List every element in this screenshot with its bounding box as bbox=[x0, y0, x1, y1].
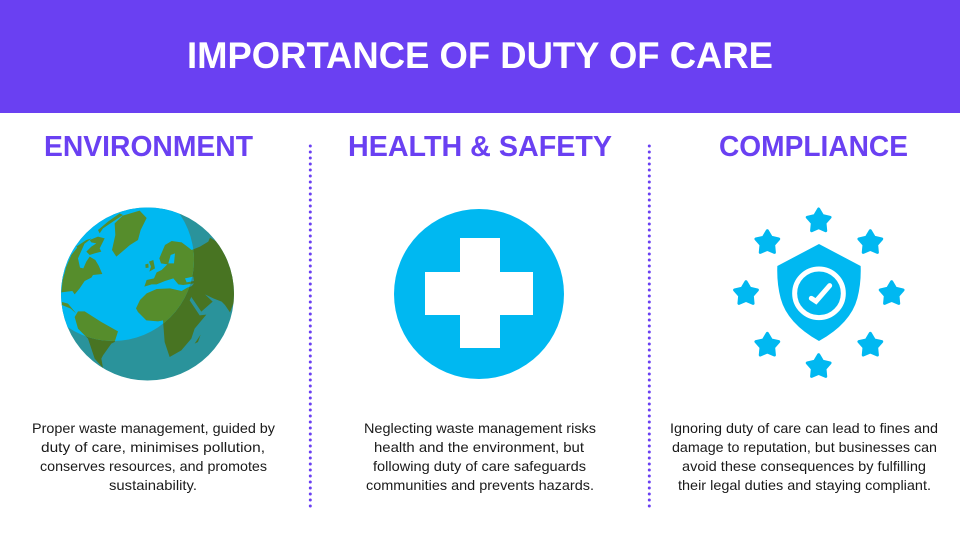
text: environment description bbox=[32, 420, 275, 493]
title: IMPORTANCE OF DUTY OF CARE bbox=[187, 35, 773, 76]
header banner bbox=[0, 0, 960, 113]
panel: health and safety bbox=[348, 131, 612, 493]
icon: medical cross bbox=[394, 209, 564, 379]
heading: health and safety: HEALTH & SAFETY bbox=[348, 131, 612, 163]
panel: compliance bbox=[670, 131, 938, 493]
icon: shield with stars bbox=[735, 209, 903, 376]
icon: globe bbox=[61, 208, 234, 380]
text: compliance description: their legal duties and staying compliant. bbox=[678, 477, 931, 493]
text: health and safety description: health and the environment, but bbox=[374, 439, 584, 455]
text: compliance description bbox=[670, 420, 938, 493]
divider left bbox=[309, 146, 312, 509]
text: health and safety description: Neglecting waste management risks bbox=[364, 420, 596, 436]
divider right bbox=[648, 146, 651, 509]
text: environment description: sustainability. bbox=[109, 477, 197, 493]
heading: compliance: COMPLIANCE bbox=[719, 131, 908, 163]
text: compliance description: damage to reputation, but businesses can bbox=[672, 439, 937, 455]
text: environment description: duty of care, minimises pollution, bbox=[41, 439, 265, 455]
heading: environment: ENVIRONMENT bbox=[44, 131, 253, 163]
panel: environment bbox=[32, 131, 275, 493]
text: compliance description: Ignoring duty of care can lead to fines and bbox=[670, 420, 938, 436]
text: environment description: conserves resources, and promotes bbox=[40, 458, 267, 474]
text: health and safety description: following duty of care safeguards bbox=[373, 458, 586, 474]
text: health and safety description bbox=[364, 420, 596, 493]
text: health and safety description: communities and prevents hazards. bbox=[366, 477, 594, 493]
text: compliance description: avoid these consequences by fulfilling bbox=[682, 458, 926, 474]
text: environment description: Proper waste management, guided by bbox=[32, 420, 275, 436]
